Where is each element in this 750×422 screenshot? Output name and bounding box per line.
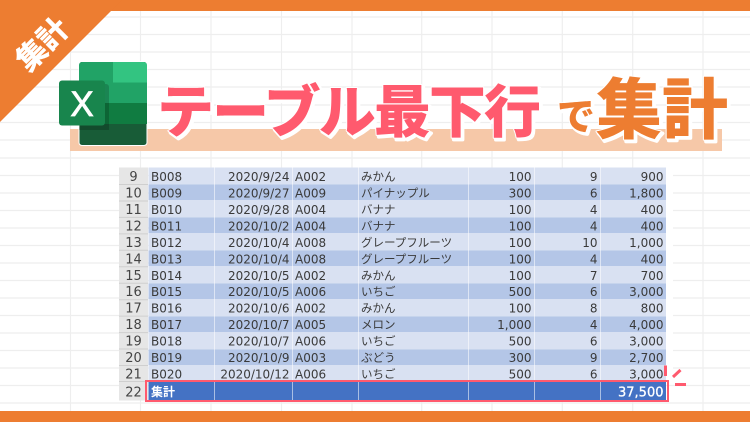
top orange bar <box>0 0 750 11</box>
column: codes: A009 <box>295 186 326 200</box>
column: IDs: B009 <box>151 186 182 200</box>
column: unit prices: 500 <box>509 285 532 299</box>
column: IDs: B018 <box>151 334 182 348</box>
title: で: で <box>559 88 597 143</box>
row headers: 21 <box>125 368 142 382</box>
column: IDs: B016 <box>151 302 182 316</box>
column: codes: A006 <box>295 285 326 299</box>
column: IDs: B017 <box>151 318 182 332</box>
total row highlight frame <box>146 381 668 401</box>
column: unit prices: 300 <box>509 351 532 365</box>
column: dates: 2020/10/12 <box>220 368 290 382</box>
column: unit prices: 100 <box>509 302 532 316</box>
column: quantities <box>582 170 598 382</box>
column: dates: 2020/10/4 <box>228 252 290 266</box>
column: unit prices <box>497 170 532 382</box>
column: codes: A004 <box>295 220 326 234</box>
icon: emphasis marks <box>666 366 686 384</box>
column: quantities: 4 <box>590 252 598 266</box>
column: product names: みかん <box>361 267 396 283</box>
column: dates: 2020/10/5 <box>228 285 290 299</box>
title: テーブル最下行: テーブル最下行 <box>157 67 541 149</box>
column: quantities: 6 <box>590 334 598 348</box>
column: quantities: 4 <box>590 318 598 332</box>
row headers: 22 <box>125 386 142 400</box>
column: codes: A002 <box>295 269 326 283</box>
column: codes: A002 <box>295 170 326 184</box>
row headers: 17 <box>125 302 142 317</box>
title: で: で <box>557 86 595 141</box>
column: product names: パイナップル <box>361 185 430 201</box>
column: quantities: 9 <box>590 351 598 365</box>
row headers: 15 <box>125 269 142 284</box>
column: dates <box>220 170 290 382</box>
column: amounts: 3,000 <box>629 368 664 382</box>
column: unit prices: 100 <box>509 252 532 266</box>
column: dates: 2020/9/24 <box>228 170 290 184</box>
corner badge: 集計: 集計 <box>4 6 77 79</box>
column: amounts: 3,000 <box>629 334 664 348</box>
column: codes: A006 <box>295 334 326 348</box>
column: amounts: 900 <box>641 170 664 184</box>
column: IDs: B013 <box>151 252 182 266</box>
column: product names: みかん <box>361 300 396 316</box>
column: quantities: 8 <box>590 302 598 316</box>
row headers: 13 <box>125 236 142 251</box>
column: dates: 2020/10/4 <box>228 236 290 250</box>
icon: Excel logo: X <box>70 85 94 124</box>
column: unit prices: 100 <box>509 236 532 250</box>
column: quantities: 6 <box>590 368 598 382</box>
icon: Excel logo <box>59 62 147 146</box>
row headers: 20 <box>125 351 142 366</box>
column: product names: バナナ <box>361 218 396 234</box>
column: quantities: 4 <box>590 203 598 217</box>
row headers: 12 <box>125 220 142 234</box>
row stripes <box>148 166 673 400</box>
row headers: 9 <box>129 170 138 185</box>
total row label: 集計 <box>151 384 175 399</box>
column: amounts <box>629 170 664 382</box>
column: dates: 2020/10/9 <box>228 351 290 365</box>
title: 集計: 集計 <box>596 57 728 153</box>
column: amounts: 2,700 <box>629 351 664 365</box>
column: IDs: B010 <box>151 203 182 217</box>
column: product names: いちご <box>361 366 396 382</box>
column: codes: A006 <box>295 368 326 382</box>
column: codes: A008 <box>295 252 326 266</box>
column: quantities: 6 <box>590 285 598 299</box>
column: codes: A004 <box>295 203 326 217</box>
column: unit prices: 1,000 <box>497 318 532 332</box>
column: dates: 2020/9/27 <box>228 186 290 200</box>
column: amounts: 4,000 <box>629 318 664 332</box>
column: unit prices: 500 <box>509 368 532 382</box>
column: amounts: 1,800 <box>629 186 664 200</box>
column: dates: 2020/10/2 <box>228 220 290 234</box>
column: quantities: 10 <box>582 236 598 250</box>
column: amounts: 1,000 <box>629 236 664 250</box>
corner badge: 集計 <box>0 0 122 122</box>
column: IDs: B019 <box>151 351 182 365</box>
total row amount: 37,500 <box>618 386 664 400</box>
row headers: 14 <box>125 252 142 267</box>
column: product names: グレープフルーツ <box>361 251 452 267</box>
row headers: 10 <box>125 186 142 202</box>
column: IDs: B014 <box>151 269 182 283</box>
column: amounts: 400 <box>641 252 664 266</box>
column: IDs: B020 <box>151 368 182 382</box>
column: quantities: 7 <box>590 269 598 283</box>
column: product names: みかん <box>361 168 396 184</box>
column: IDs: B011 <box>151 220 182 234</box>
column: amounts: 400 <box>641 203 664 217</box>
column: product names: グレープフルーツ <box>361 234 452 250</box>
column: IDs <box>151 170 182 382</box>
column: product names: バナナ <box>361 202 396 218</box>
column: dates: 2020/10/7 <box>228 334 290 348</box>
column: quantities: 6 <box>590 186 598 200</box>
column: product names: メロン <box>361 316 396 332</box>
row headers: 16 <box>125 285 142 300</box>
column: unit prices: 100 <box>509 203 532 217</box>
column: dates: 2020/10/6 <box>228 302 290 316</box>
title highlight band <box>70 129 722 151</box>
column: codes <box>295 170 326 382</box>
column: dates: 2020/10/7 <box>228 318 290 332</box>
column: unit prices: 100 <box>509 220 532 234</box>
column: IDs: B015 <box>151 285 182 299</box>
column: unit prices: 300 <box>509 186 532 200</box>
column: product names: いちご <box>361 333 396 349</box>
column: codes: A002 <box>295 302 326 316</box>
column: IDs: B008 <box>151 170 182 184</box>
column: codes: A008 <box>295 236 326 250</box>
column: quantities: 9 <box>590 170 598 184</box>
row headers: 11 <box>125 203 142 218</box>
column: quantities: 4 <box>590 220 598 234</box>
row headers <box>119 168 148 400</box>
column: dates: 2020/9/28 <box>228 203 290 217</box>
column: product names: いちご <box>361 284 396 300</box>
title: 集計: 集計 <box>598 59 730 155</box>
row headers: 18 <box>125 318 142 333</box>
column: amounts: 800 <box>641 302 664 316</box>
column: IDs: B012 <box>151 236 182 250</box>
column: unit prices: 100 <box>509 170 532 184</box>
column: unit prices: 500 <box>509 334 532 348</box>
column: amounts: 400 <box>641 220 664 234</box>
column: unit prices: 100 <box>509 269 532 283</box>
title: テーブル最下行: テーブル最下行 <box>159 69 543 151</box>
bottom orange bar <box>0 411 750 422</box>
column: product names: ぶどう <box>361 350 396 366</box>
column: amounts: 3,000 <box>629 285 664 299</box>
column: amounts: 700 <box>641 269 664 283</box>
row headers: 19 <box>125 334 142 350</box>
column: codes: A005 <box>295 318 326 332</box>
spreadsheet table <box>119 166 673 401</box>
column: codes: A003 <box>295 351 326 365</box>
column: product names <box>361 168 452 382</box>
column: dates: 2020/10/5 <box>228 269 290 283</box>
